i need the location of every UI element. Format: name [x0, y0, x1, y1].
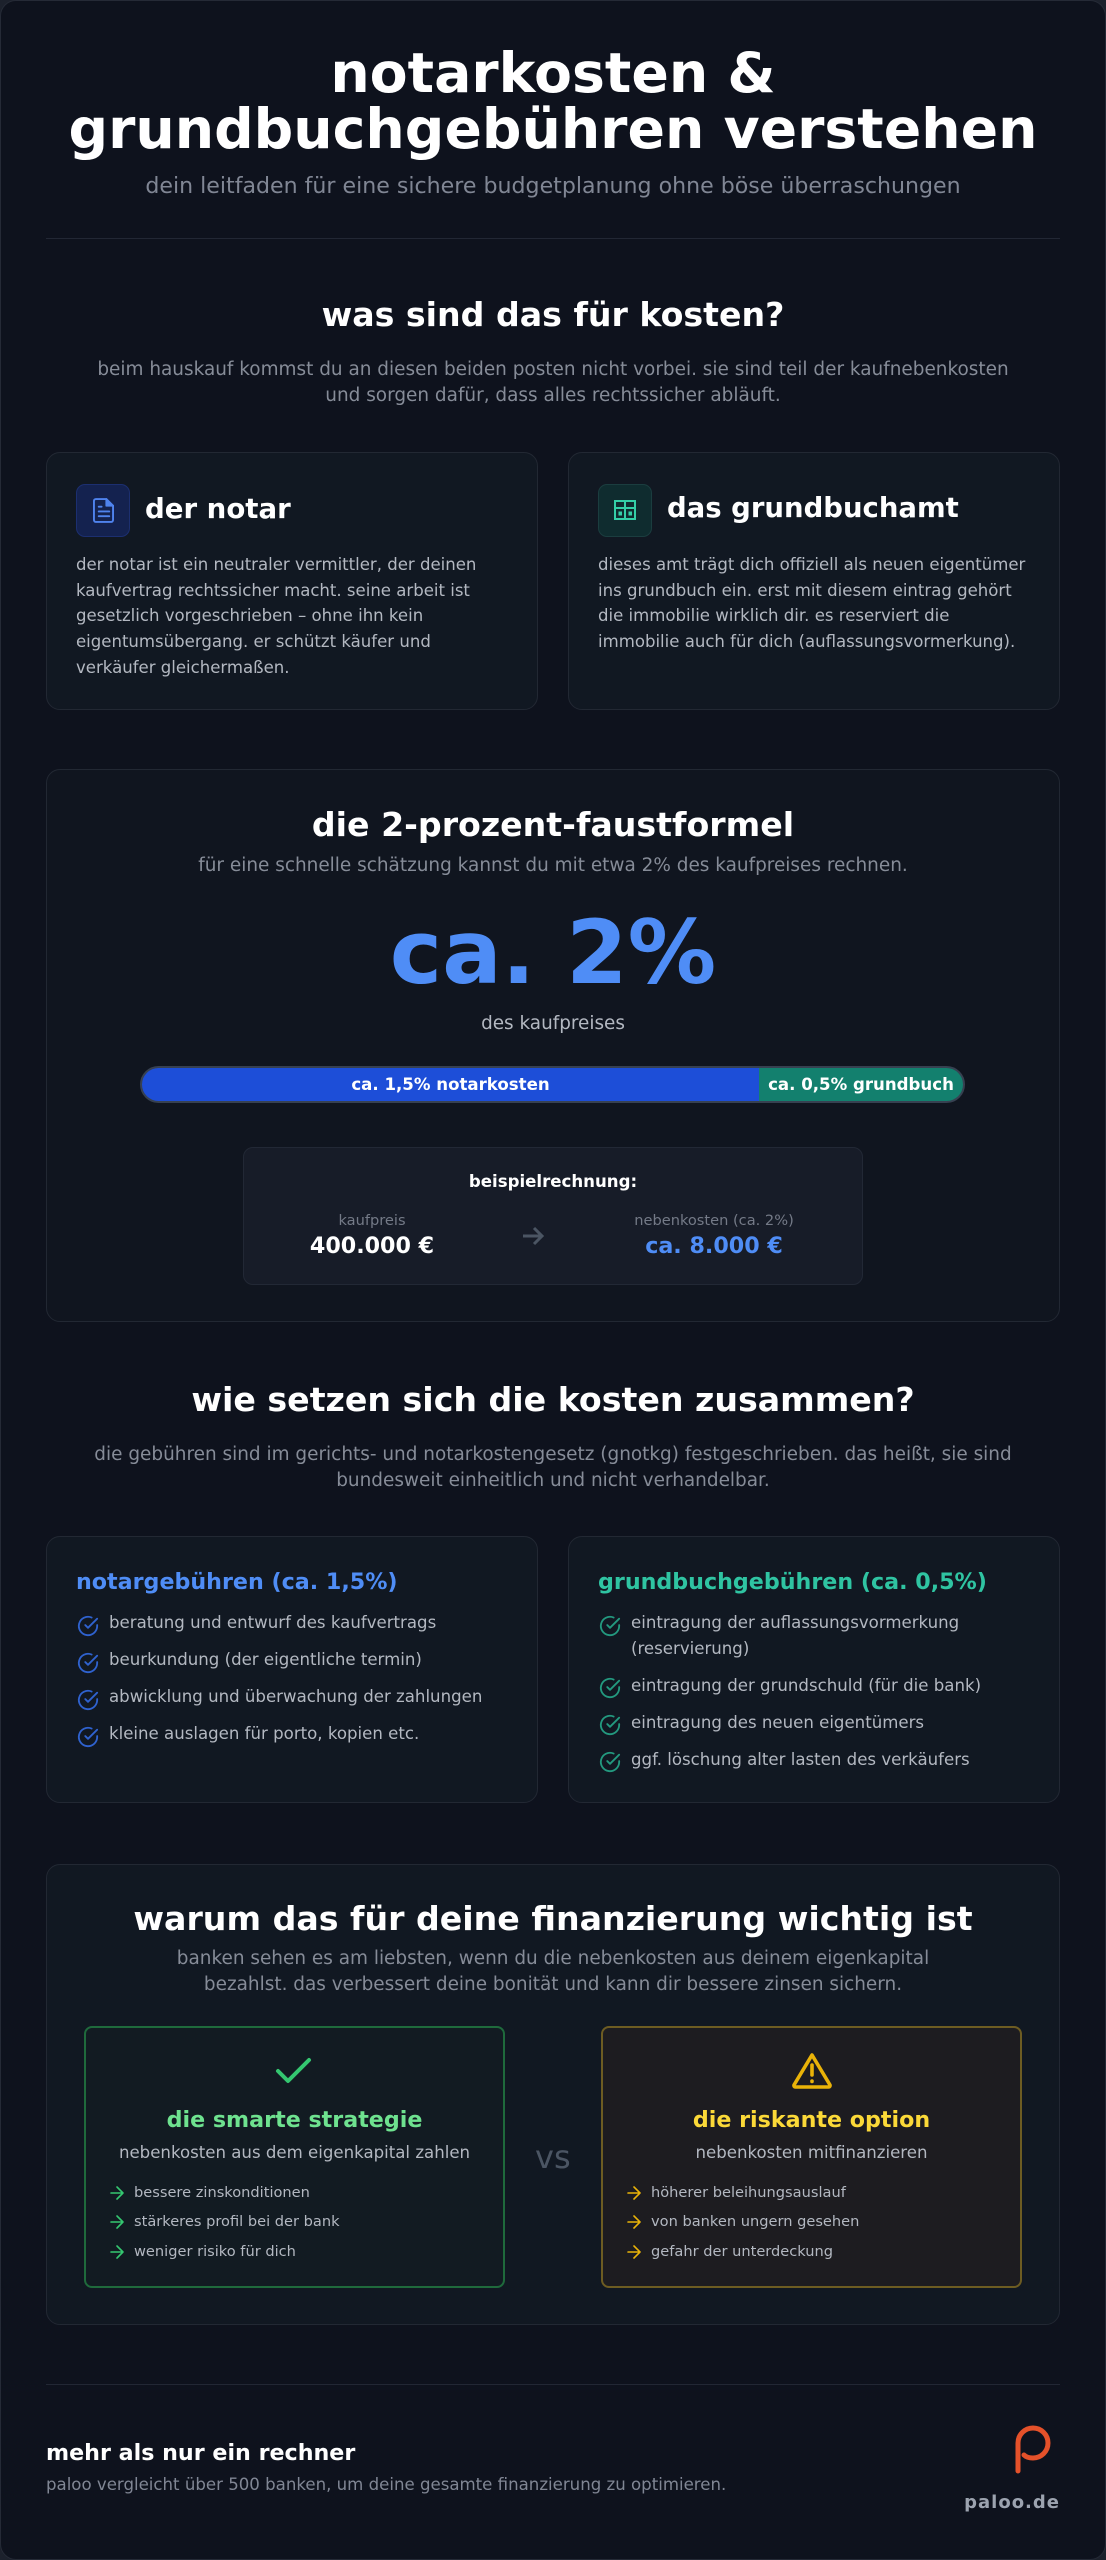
item text: kleine auslagen für porto, kopien etc.: [109, 1724, 419, 1743]
benefit: weniger risiko für dich: [134, 2243, 296, 2260]
card text: der notar ist ein neutraler vermittler, der deinen: [76, 555, 476, 574]
subtitle: dein leitfaden für eine sichere budgetplanung ohne böse überraschungen: [145, 173, 961, 199]
option subtitle: nebenkosten aus dem eigenkapital zahlen: [119, 2143, 470, 2162]
intro text: bezahlst. das verbessert deine bonität und kann dir bessere zinsen sichern.: [204, 1974, 902, 1995]
bar segment: grundbuch: ca. 0,5% grundbuch: [768, 1075, 954, 1094]
option: die riskante option: [601, 2026, 1022, 2288]
card text: gesetzlich vorgeschrieben – ohne ihn kein: [76, 606, 423, 625]
item text: [631, 1613, 959, 1658]
card text: [76, 555, 476, 677]
arrow: [110, 2186, 124, 2200]
icon: warning: [792, 2053, 832, 2089]
panel: 2-prozent-faustformel: [46, 769, 1060, 1322]
bar segment: notarkosten: [142, 1068, 759, 1101]
card text: immobilie auch für dich (auflassungsvormerkung).: [598, 632, 1015, 651]
card text: kaufvertrag rechtssicher macht. seine arbeit ist: [76, 581, 470, 600]
card heading: das grundbuchamt: [667, 492, 959, 524]
item icon: [600, 1714, 620, 1736]
heading: wie setzen sich die kosten zusammen?: [191, 1380, 915, 1419]
panel: der notar: [46, 452, 538, 710]
arrow: [523, 1227, 544, 1245]
arrow: [627, 2186, 641, 2200]
arrow: [110, 2245, 124, 2259]
header: [69, 42, 1037, 199]
footer text: paloo vergleicht über 500 banken, um deine gesamte finanzierung zu optimieren.: [46, 2475, 726, 2494]
panel: finanzierung: [46, 1864, 1060, 2325]
benefit: stärkeres profil bei der bank: [134, 2213, 340, 2230]
option title: die riskante option: [693, 2107, 930, 2133]
arrow: [627, 2215, 641, 2229]
purchase price: 400.000 €: [310, 1233, 434, 1259]
intro text: die gebühren sind im gerichts- und notarkostengesetz (gnotkg) festgeschrieben. das heißt, sie sind: [94, 1444, 1012, 1465]
heading: was sind das für kosten?: [322, 295, 784, 334]
card text: verkäufer gleichermaßen.: [76, 658, 290, 677]
intro text: [94, 1444, 1012, 1491]
intro text: und sorgen dafür, dass alles rechtssicher abläuft.: [325, 385, 781, 406]
big number caption: des kaufpreises: [481, 1013, 625, 1034]
item icon: [78, 1690, 98, 1710]
option subtitle: nebenkosten mitfinanzieren: [696, 2143, 927, 2162]
drawback: höherer beleihungsauslauf: [651, 2184, 846, 2201]
brand name: paloo.de: [964, 2492, 1060, 2513]
intro text: beim hauskauf kommst du an diesen beiden posten nicht vorbei. sie sind teil der kaufnebenkosten: [97, 359, 1009, 380]
item icon: [600, 1616, 620, 1636]
item icon: [600, 1678, 620, 1698]
item text: eintragung der grundschuld (für die bank): [631, 1676, 981, 1695]
item icon: [78, 1616, 98, 1636]
item text: beratung und entwurf des kaufvertrags: [109, 1613, 436, 1632]
item text: eintragung der auflassungsvormerkung: [631, 1613, 959, 1632]
section: was sind das für kosten: [97, 295, 1009, 406]
card text: die immobilie wirklich dir. es reserviert die: [598, 606, 949, 625]
footer heading: mehr als nur ein rechner: [46, 2440, 355, 2466]
logo: [1016, 2426, 1050, 2474]
title: grundbuchgebühren verstehen: [69, 98, 1037, 162]
item text: abwicklung und überwachung der zahlungen: [109, 1687, 482, 1706]
item text: beurkundung (der eigentliche termin): [109, 1650, 422, 1669]
heading: die 2-prozent-faustformel: [312, 805, 794, 844]
option title: die smarte strategie: [167, 2107, 422, 2133]
card text: eigentumsübergang. er schützt käufer und: [76, 632, 431, 651]
item text: eintragung des neuen eigentümers: [631, 1713, 924, 1732]
item icon: [78, 1726, 98, 1748]
additional costs: nebenkosten (ca. 2%): [634, 1212, 794, 1229]
item text: ggf. löschung alter lasten des verkäufers: [631, 1750, 970, 1769]
section: zusammensetzung: [94, 1380, 1012, 1491]
card text: [598, 555, 1026, 651]
stacked bar: [140, 1066, 965, 1103]
icon: document: [76, 484, 130, 537]
footer: [46, 2426, 1060, 2513]
intro text: [97, 359, 1009, 406]
intro text: banken sehen es am liebsten, wenn du die nebenkosten aus deinem eigenkapital: [177, 1948, 929, 1969]
intro text: [177, 1948, 929, 1995]
arrow: [110, 2215, 124, 2229]
option: die smarte strategie: [84, 2026, 505, 2288]
intro text: bundesweit einheitlich und nicht verhandelbar.: [336, 1470, 770, 1491]
card heading: notargebühren (ca. 1,5%): [76, 1569, 398, 1595]
panel: grundbuchgebühren: [568, 1536, 1060, 1803]
vs label: vs: [535, 2138, 571, 2176]
icon: check: [276, 2058, 312, 2084]
icon: register: [598, 484, 652, 537]
drawback: gefahr der unterdeckung: [651, 2243, 833, 2260]
benefit: bessere zinskonditionen: [134, 2184, 310, 2201]
item icon: [600, 1752, 620, 1772]
big number: ca. 2%: [390, 901, 716, 1004]
additional costs: [634, 1212, 794, 1259]
purchase price: [310, 1212, 434, 1259]
heading: warum das für deine finanzierung wichtig ist: [133, 1899, 973, 1938]
list: [78, 1613, 482, 1748]
list: [600, 1613, 981, 1772]
panel: notargebühren: [46, 1536, 538, 1803]
purchase price: kaufpreis: [338, 1212, 406, 1229]
card heading: der notar: [145, 492, 291, 525]
card text: dieses amt trägt dich offiziell als neuen eigentümer: [598, 555, 1025, 574]
card text: ins grundbuch ein. erst mit diesem eintrag gehört: [598, 581, 1012, 600]
example calculation: [243, 1147, 863, 1285]
drawback: von banken ungern gesehen: [651, 2213, 859, 2230]
title: [69, 42, 1037, 162]
additional costs: ca. 8.000 €: [645, 1233, 783, 1259]
item icon: [78, 1652, 98, 1674]
title: notarkosten &: [330, 42, 776, 106]
panel: das grundbuchamt: [568, 452, 1060, 710]
item text: (reservierung): [631, 1639, 749, 1658]
example title: beispielrechnung:: [469, 1172, 637, 1191]
bar segment: notarkosten: ca. 1,5% notarkosten: [351, 1075, 550, 1094]
bar segment: grundbuch: [759, 1068, 963, 1101]
arrow: [627, 2245, 641, 2259]
card heading: grundbuchgebühren (ca. 0,5%): [598, 1569, 987, 1595]
subheading: für eine schnelle schätzung kannst du mit etwa 2% des kaufpreises rechnen.: [198, 855, 908, 876]
